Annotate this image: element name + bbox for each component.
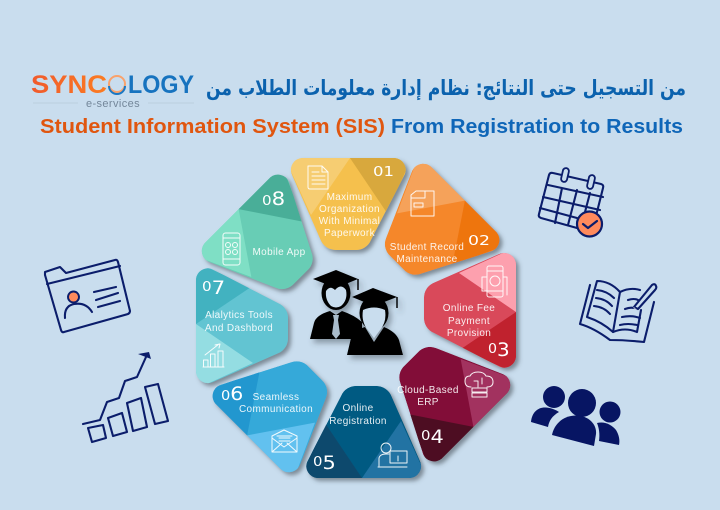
text: online fee label: Payment — [448, 316, 490, 327]
text: maximum organization label — [319, 192, 380, 239]
panel: 07 analytics tools — [196, 268, 294, 388]
text: cloud ERP label: Cloud-Based — [397, 385, 459, 396]
panel: 05 online registration — [306, 386, 426, 484]
number: 06: 06 — [221, 383, 243, 405]
icon: growth chart — [203, 344, 224, 367]
text: online fee label — [443, 303, 495, 339]
icon: cloud server — [465, 372, 493, 397]
icon: calendar with check — [539, 168, 603, 236]
icon: smartphone — [223, 233, 240, 265]
text: student record label — [390, 242, 464, 265]
number: 07: 7 — [212, 276, 225, 299]
number: 08: 08 — [262, 187, 285, 210]
subtitle: English heading: From Registration to Results — [391, 115, 683, 138]
subtitle: English heading: Student Information System (SIS) — [40, 115, 385, 138]
icon: phone payment — [482, 266, 507, 297]
text: analytics label — [205, 310, 273, 334]
number: 05: 0 — [313, 455, 322, 470]
number: 05: 5 — [322, 451, 336, 474]
panel: 06 seamless communication — [212, 361, 332, 478]
icon: file folder — [411, 191, 434, 216]
text: seamless communication label: Seamless — [253, 392, 299, 403]
icon: open book with pen — [580, 281, 656, 342]
logo: Syncology e-services — [31, 71, 194, 110]
icon: document — [308, 166, 328, 189]
text: maximum organization label: Maximum — [327, 192, 372, 203]
panel: 04 cloud-based ERP — [399, 346, 516, 467]
number: 04: 0 — [421, 429, 430, 444]
text: online registration label — [329, 403, 387, 427]
text: cloud ERP label — [397, 385, 459, 408]
number: 01: 01 — [373, 164, 394, 180]
text: maximum organization label: With Minimal — [319, 216, 380, 227]
number: 07: 0 — [202, 280, 212, 295]
number: 04: 4 — [430, 425, 444, 448]
text: online fee label: Online Fee — [443, 303, 495, 314]
text: maximum organization label: Organization — [319, 204, 380, 215]
icon: student id folder — [45, 260, 130, 332]
icon: graduates — [310, 270, 403, 355]
logo: Syncology e-services: SYNC — [31, 71, 107, 99]
subtitle: English heading — [40, 115, 683, 138]
text: seamless communication label — [239, 392, 313, 415]
text: online fee label: Provision — [447, 328, 491, 339]
text: analytics label: Alalytics Tools — [205, 310, 273, 321]
text: maximum organization label: Paperwork — [324, 228, 376, 239]
number: 03: 3 — [497, 338, 510, 361]
icon: group of people — [531, 386, 620, 446]
number: 03: 0 — [488, 341, 497, 357]
icon: person at desktop — [378, 443, 407, 467]
text: student record label: Maintenance — [396, 254, 458, 265]
text: online registration label: Registration — [329, 416, 387, 427]
text: online registration label: Online — [342, 403, 374, 414]
number: 02: 02 — [468, 233, 490, 249]
logo: Syncology e-services: LOGY — [128, 71, 194, 99]
text: mobile app label: Mobile App — [253, 247, 306, 258]
logo: Syncology e-services: e-services — [86, 98, 140, 110]
panel: 03 online fee payment — [424, 252, 522, 374]
text: analytics label: And Dashbord — [205, 323, 273, 334]
text: seamless communication label: Communication — [239, 404, 313, 415]
panel: 01 maximum organization — [290, 158, 412, 256]
panel: 02 student record maintenance — [384, 164, 505, 280]
icon: rising bar chart — [83, 352, 168, 442]
panel: 08 mobile app — [202, 174, 318, 294]
icon: envelope — [272, 430, 297, 452]
text: cloud ERP label: ERP — [417, 397, 439, 408]
text: student record label: Student Record — [390, 242, 464, 253]
